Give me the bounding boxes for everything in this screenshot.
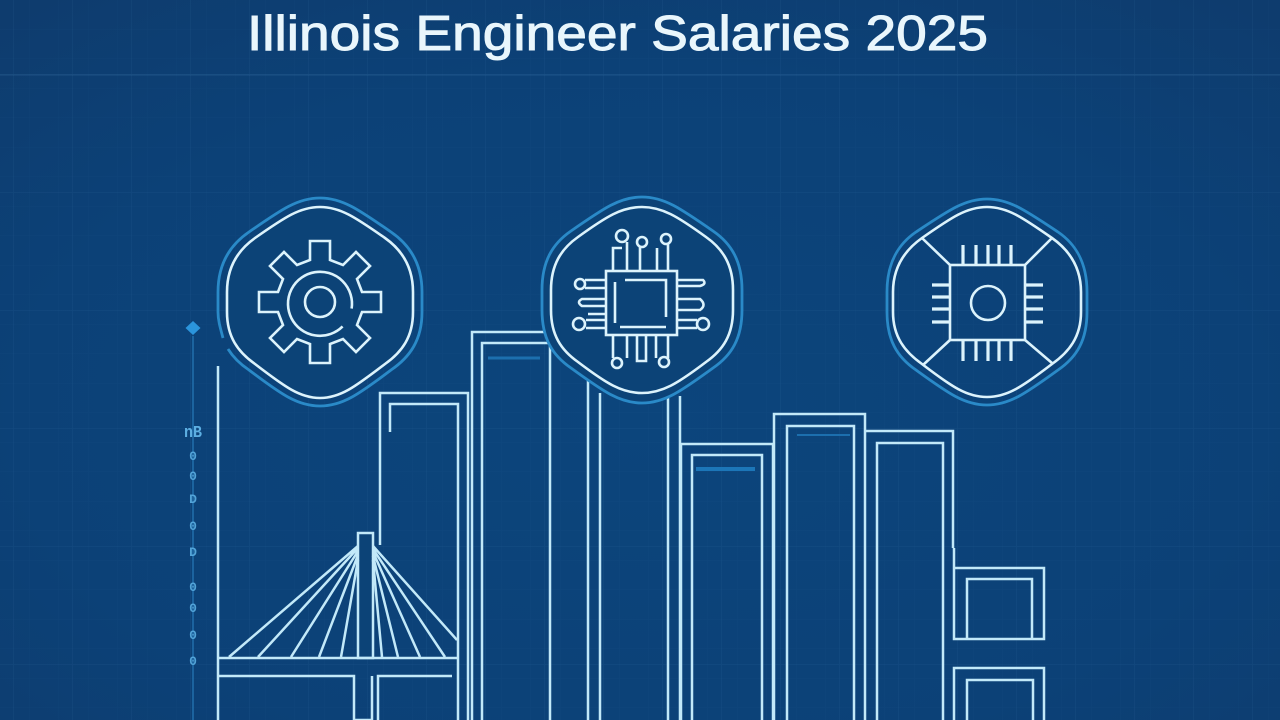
ruler labels: 0 [189, 469, 197, 484]
bar 4 [681, 444, 773, 720]
left pins [573, 279, 606, 330]
ruler labels [184, 424, 202, 669]
bar 1 [380, 393, 468, 720]
icon: processor badge [887, 199, 1087, 405]
ruler labels: D [189, 492, 197, 507]
ruler labels: 0 [189, 601, 197, 616]
icon: circuit chip badge [542, 197, 742, 403]
icon: ruler diamond marker [186, 321, 200, 335]
bar 2 [472, 332, 550, 720]
ruler labels: nB [184, 424, 202, 443]
icon: gear badge [218, 198, 422, 406]
ruler labels: D [189, 545, 197, 560]
bottom pins [612, 335, 669, 368]
icon: cable-stayed bridge [219, 533, 457, 720]
top pins [613, 230, 671, 271]
bar 6 [866, 431, 953, 720]
bar 5 [774, 414, 865, 720]
ruler labels: 0 [189, 449, 197, 464]
vertical scale ruler [184, 321, 202, 720]
right pins [677, 280, 709, 330]
bar 7 lower [954, 668, 1044, 720]
title: Illinois Engineer Salaries 2025 [247, 7, 988, 61]
chart axis [217, 366, 219, 720]
bar 3 [588, 380, 680, 720]
bar 7 upper [954, 548, 1044, 639]
ruler labels: 0 [189, 519, 197, 534]
ruler labels: 0 [189, 580, 197, 595]
bar chart [218, 332, 1044, 720]
ruler labels: 0 [189, 654, 197, 669]
ruler labels: 0 [189, 628, 197, 643]
